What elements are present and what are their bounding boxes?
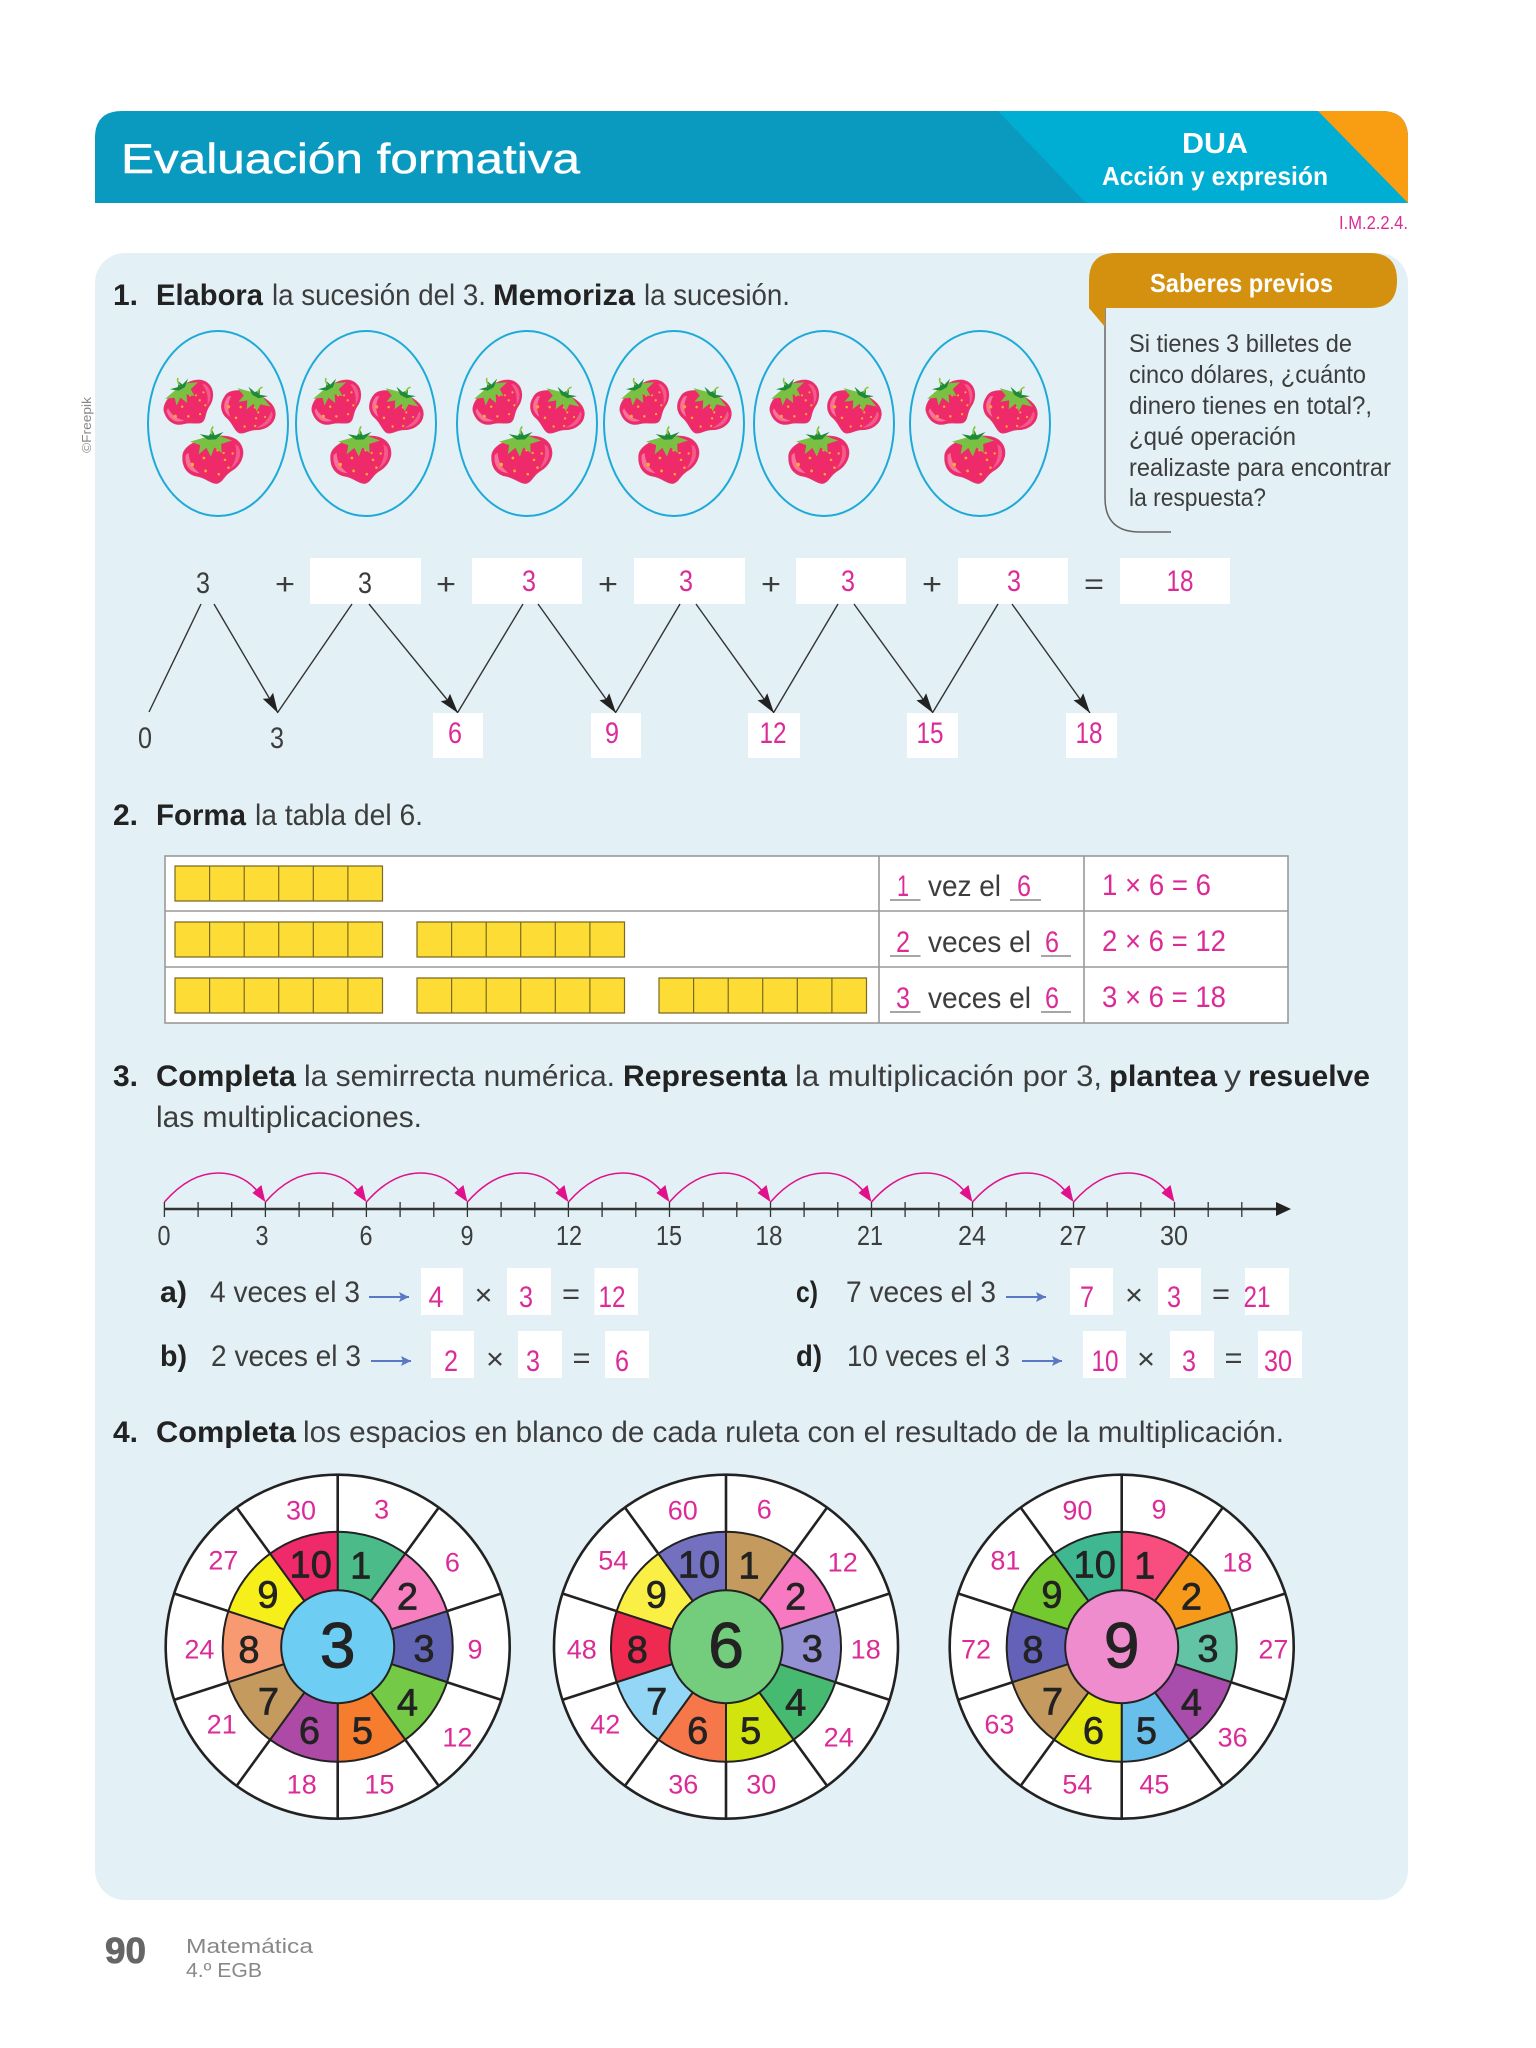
wheel: table of 3: 9 [257, 1575, 279, 1617]
multiplication c: = [1212, 1278, 1230, 1311]
title: Evaluación formativa [121, 135, 581, 182]
wheel: table of 3: 1 [350, 1546, 371, 1588]
number line [158, 1173, 1291, 1251]
yellow block groups [175, 866, 866, 1013]
number labels: 27 [1060, 1220, 1086, 1251]
wheel: table of 3: 21 [207, 1710, 237, 1740]
wheel: table of 6 [554, 1475, 898, 1819]
wheel: table of 3: 6 [299, 1711, 320, 1753]
table labels: veces el [928, 926, 1031, 959]
addition row: 3 [679, 565, 693, 598]
addition row: 3 [358, 567, 372, 600]
heading: item 1: Elabora [156, 279, 263, 312]
wheel: table of 9: 8 [1022, 1630, 1044, 1672]
multiplication b: 3 [526, 1345, 540, 1378]
multiplication d: d) [796, 1340, 822, 1373]
wheel: table of 9: 45 [1139, 1770, 1169, 1800]
wheel: table of 9: 3 [1197, 1629, 1219, 1671]
panel: saberes previos: la respuesta? [1129, 484, 1266, 512]
table labels: 1 [897, 870, 909, 903]
wheel: table of 9: 2 [1181, 1577, 1202, 1619]
multiplication d: 3 [1182, 1345, 1196, 1378]
wheel: table of 9: 72 [961, 1635, 991, 1665]
multiplication a: 4 [428, 1281, 444, 1314]
wheel: table of 3: 30 [286, 1496, 316, 1526]
wheel: table of 6: 30 [746, 1770, 776, 1800]
image credit: ©Freepik [79, 396, 94, 453]
sequence results: 6 [448, 717, 462, 750]
multiplication b: 6 [615, 1345, 629, 1378]
heading: item 2: Forma [156, 799, 246, 832]
heading: item 3: 3. [113, 1060, 138, 1093]
wheel: table of 9: 27 [1258, 1635, 1288, 1665]
header band [95, 111, 1408, 203]
wheel: table of 3: 15 [364, 1770, 394, 1800]
multiplication c: c) [796, 1276, 818, 1309]
wheel: table of 6: 24 [824, 1723, 854, 1753]
wheel: table of 3: 5 [352, 1711, 373, 1753]
number labels: 6 [360, 1220, 372, 1251]
heading: item 3: las multiplicaciones. [156, 1101, 422, 1134]
multiplication c: 7 [1080, 1281, 1094, 1314]
multiplication b: b) [160, 1340, 187, 1373]
wheel: table of 6: 6 [687, 1711, 708, 1753]
wheel: table of 3: 18 [287, 1770, 317, 1800]
multiplication a: = [562, 1278, 580, 1311]
wheel: table of 6: 3 [802, 1629, 823, 1671]
wheel: table of 3: 24 [184, 1635, 214, 1665]
wheel: table of 9: 9 [1104, 1610, 1139, 1682]
table of 6 [165, 856, 1288, 1023]
table labels: 6 [1045, 926, 1059, 959]
wheel: table of 6: 12 [828, 1548, 858, 1578]
heading: item 3: Completa [156, 1060, 296, 1093]
wheel: table of 3: 3 [320, 1610, 355, 1682]
zigzag jump arrows [149, 604, 1090, 713]
wheel: table of 6: 10 [678, 1545, 720, 1587]
wheel: table of 3: 27 [208, 1546, 238, 1576]
wheel: table of 3: 8 [238, 1630, 260, 1672]
number labels: 24 [958, 1220, 986, 1251]
heading: item 4: 4. [113, 1416, 138, 1449]
heading: item 3: y [1224, 1060, 1241, 1093]
heading: item 1: Memoriza [493, 279, 635, 312]
wheel: table of 6: 2 [785, 1577, 806, 1619]
wheel: table of 9: 54 [1062, 1770, 1092, 1800]
heading: item 1: la sucesión. [644, 279, 790, 312]
wheel: table of 6: 6 [708, 1610, 744, 1682]
heading: item 1 [113, 279, 790, 312]
wheel: table of 6: 18 [851, 1635, 881, 1665]
wheel: table of 3 [166, 1475, 510, 1819]
addition row: + [598, 568, 618, 601]
number labels: 18 [756, 1220, 782, 1251]
number labels: 15 [656, 1220, 682, 1251]
multiplication b: 2 [444, 1345, 458, 1378]
wheel: table of 9: 6 [1083, 1711, 1104, 1753]
addition row: + [436, 568, 456, 601]
heading: item 1: la sucesión del 3. [272, 279, 486, 312]
addition row: + [761, 568, 781, 601]
multiplication a: × [474, 1279, 492, 1312]
multiplication d: × [1137, 1343, 1155, 1376]
multiplication d [796, 1331, 1302, 1378]
heading: item 3: Representa [623, 1060, 787, 1093]
sequence results: 9 [605, 717, 619, 750]
multiplication c: × [1125, 1279, 1143, 1312]
table labels: 1 × 6 = 6 [1102, 869, 1211, 902]
wheel: table of 9: 63 [984, 1710, 1014, 1740]
wheel: table of 9: 10 [1074, 1545, 1116, 1587]
table labels: 3 × 6 = 18 [1102, 981, 1226, 1014]
multiplication d: = [1224, 1342, 1242, 1375]
heading: item 3: la multiplicación por 3, [795, 1060, 1102, 1093]
panel: saberes previos: realizaste para encontrar [1129, 454, 1391, 482]
heading: item 3 [113, 1060, 1370, 1134]
multiplication c [796, 1268, 1289, 1315]
wheel: table of 6: 36 [668, 1770, 698, 1800]
heading: item 2: la tabla del 6. [255, 799, 423, 832]
number labels: 9 [460, 1220, 474, 1251]
multiplication d: 30 [1264, 1345, 1292, 1378]
multiplication a [160, 1268, 638, 1315]
wheel: table of 9: 18 [1222, 1548, 1252, 1578]
number labels: 12 [556, 1220, 582, 1251]
wheel: table of 6: 54 [598, 1546, 628, 1576]
addition row: 3 [522, 565, 536, 598]
wheel: table of 3: 4 [397, 1683, 418, 1725]
wheel: table of 9: 36 [1218, 1723, 1248, 1753]
multiplication d: 10 [1092, 1345, 1118, 1378]
badge: DUA: Acción y expresión [1102, 161, 1328, 191]
table labels: veces el [928, 982, 1031, 1015]
wheel: table of 3: 3 [413, 1629, 435, 1671]
table labels [890, 869, 1226, 1015]
table labels: 2 [896, 926, 910, 959]
wheel: table of 9 [950, 1475, 1294, 1819]
wheel: table of 9: 9 [1041, 1575, 1063, 1617]
wheel: table of 6: 9 [646, 1575, 667, 1617]
multiplication a: a) [160, 1276, 187, 1309]
wheel: table of 6: 5 [740, 1711, 761, 1753]
wheel: table of 3: 2 [397, 1577, 418, 1619]
heading: item 3: resuelve [1248, 1060, 1370, 1093]
wheel: table of 6: 8 [627, 1630, 648, 1672]
number labels [158, 1220, 1188, 1251]
panel: exercises [95, 253, 1408, 1900]
badge: DUA: DUA [1182, 128, 1248, 160]
wheel: table of 9: 81 [990, 1546, 1020, 1576]
wheel: table of 3: 3 [374, 1495, 389, 1525]
wheel: table of 6: 42 [590, 1710, 620, 1740]
multiplication b: = [572, 1342, 590, 1375]
multiplication a: 12 [598, 1281, 626, 1314]
wheel: table of 9: 1 [1134, 1546, 1155, 1588]
sequence results [138, 713, 1117, 758]
table labels: 6 [1045, 982, 1059, 1015]
multiplication b: × [486, 1343, 504, 1376]
addition row: 3 [196, 567, 210, 600]
addition row: = [1084, 568, 1104, 601]
heading: item 2 [113, 799, 423, 832]
multiplication b: 2 veces el 3 [211, 1340, 361, 1373]
number labels: 3 [256, 1220, 268, 1251]
table labels: 2 × 6 = 12 [1102, 925, 1226, 958]
addition row: 3 [1007, 565, 1021, 598]
addition row: 3 [841, 565, 855, 598]
addition row: + [275, 568, 295, 601]
badge: DUA [1102, 128, 1328, 191]
addition row [196, 558, 1230, 604]
wheel: table of 9: 5 [1136, 1711, 1157, 1753]
footer: subject [186, 1936, 314, 1982]
number labels: 0 [158, 1220, 170, 1251]
wheel: table of 9: 7 [1042, 1682, 1063, 1724]
heading: item 3: plantea [1109, 1060, 1217, 1093]
wheel: table of 3: 6 [445, 1548, 460, 1578]
footer: page number: 90 [105, 1930, 146, 1971]
wheel: table of 9: 9 [1151, 1495, 1167, 1525]
panel: saberes previos: ¿qué operación [1129, 423, 1296, 451]
multiplication d: 10 veces el 3 [847, 1340, 1010, 1373]
sequence results: 15 [916, 717, 944, 750]
heading: item 1: 1. [113, 279, 138, 312]
heading: item 4: los espacios en blanco de cada ruleta con el resultado de la multiplicación. [303, 1416, 1284, 1449]
wheel: table of 3: 9 [467, 1635, 483, 1665]
footer: subject: 4.º EGB [186, 1960, 262, 1982]
addition row: + [922, 568, 942, 601]
footer: subject: Matemática [186, 1936, 314, 1958]
number labels: 21 [857, 1220, 883, 1251]
multiplication c: 21 [1244, 1281, 1270, 1314]
wheel: table of 6: 4 [785, 1683, 806, 1725]
wheel: table of 9: 90 [1062, 1496, 1092, 1526]
multiplication c: 3 [1167, 1281, 1181, 1314]
multiplication a: 4 veces el 3 [210, 1276, 360, 1309]
table labels: vez el [928, 870, 1001, 903]
heading: item 2: 2. [113, 799, 138, 832]
panel: saberes previos: Si tienes 3 billetes de [1129, 330, 1352, 358]
wheel: table of 3: 10 [290, 1545, 332, 1587]
heading: item 3: la semirrecta numérica. [304, 1060, 615, 1093]
number labels: 30 [1160, 1220, 1188, 1251]
panel: saberes previos: Saberes previos [1150, 268, 1333, 298]
panel: saberes previos: dinero tienes en total?, [1129, 392, 1372, 420]
sequence results: 0 [138, 722, 152, 755]
panel: saberes previos: cinco dólares, ¿cuánto [1129, 361, 1366, 389]
wheel: table of 6: 1 [738, 1546, 760, 1588]
table labels: 3 [896, 982, 910, 1015]
addition row: 18 [1166, 565, 1194, 598]
wheel: table of 9: 4 [1181, 1683, 1202, 1725]
sequence results: 18 [1076, 717, 1102, 750]
wheel: table of 6: 48 [567, 1635, 597, 1665]
strawberry groups [148, 331, 1050, 516]
heading: item 4: Completa [156, 1416, 296, 1449]
multiplication a: 3 [519, 1281, 533, 1314]
panel: saberes previos [1089, 253, 1397, 532]
wheel: table of 6: 60 [668, 1496, 698, 1526]
wheel: table of 6: 7 [646, 1682, 667, 1724]
wheel: table of 6: 6 [757, 1495, 772, 1525]
jump arcs [164, 1173, 1174, 1202]
indicator code: I.M.2.2.4. [1339, 213, 1408, 233]
wheel: table of 3: 7 [258, 1682, 279, 1724]
table labels: 6 [1017, 870, 1031, 903]
wheel: table of 3: 12 [442, 1723, 472, 1753]
multiplication c: 7 veces el 3 [846, 1276, 996, 1309]
multiplication b [160, 1331, 649, 1378]
sequence results: 3 [270, 722, 284, 755]
sequence results: 12 [760, 717, 786, 750]
